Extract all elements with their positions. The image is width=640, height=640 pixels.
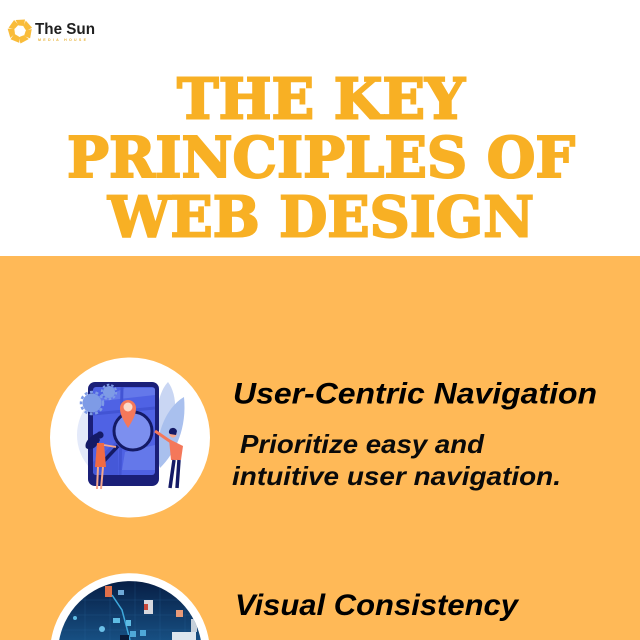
man <box>155 428 183 488</box>
circle illustration: digital interface <box>50 573 210 640</box>
magnifier <box>114 412 152 450</box>
woman <box>85 431 116 489</box>
logo wordmark: The Sun <box>35 21 95 38</box>
text block: description <box>232 429 561 491</box>
circle illustration: navigation <box>50 358 210 518</box>
background blob <box>77 387 171 483</box>
text block: description: Prioritize easy and <box>240 429 485 459</box>
heading: Visual Consistency: Visual Consistency <box>235 589 519 622</box>
logo tagline: MEDIA HOUSE <box>38 38 87 42</box>
title: WEB DESIGN <box>107 184 534 250</box>
heading: User-Centric Navigation: User-Centric Navigation <box>233 378 597 410</box>
title <box>67 66 575 250</box>
gears <box>81 385 116 414</box>
phone <box>88 382 159 486</box>
leaves <box>158 382 175 448</box>
orange panel <box>0 256 640 640</box>
phone screen map <box>93 387 155 475</box>
icon: sun <box>8 20 32 44</box>
text block: description: intuitive user navigation. <box>232 461 561 491</box>
title: PRINCIPLES OF <box>67 125 575 191</box>
map pin <box>120 400 136 428</box>
title: THE KEY <box>177 66 466 132</box>
logo: The Sun Media House <box>8 20 95 44</box>
